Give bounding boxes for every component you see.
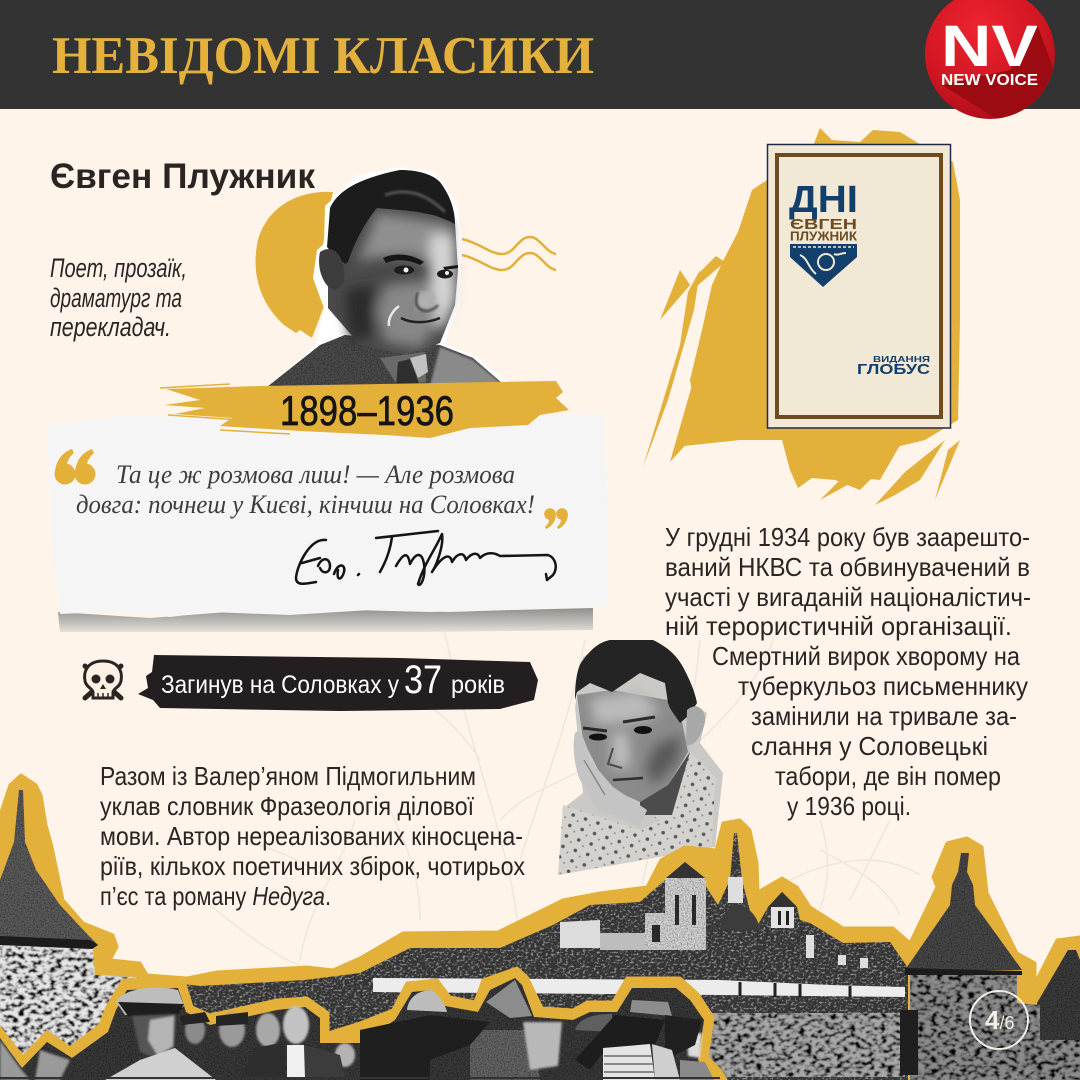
tower roof [0,790,98,945]
face and neck [328,205,458,355]
eyes and brows [383,255,458,270]
icon: closing quotation mark [544,508,568,529]
header bar [0,0,1080,109]
cover author: ПЛУЖНИК [790,228,857,244]
text: occupation: драматург та [50,283,182,313]
brush stroke with dates: 1898–1936 [280,387,454,434]
left tower [0,790,140,1060]
cover publisher: ВИДАННЯ [873,354,930,364]
text: arrest and exile: участі у вигаданій націоналістич- [665,582,1031,612]
text: arrest and exile [665,522,1031,821]
caps [180,1012,248,1026]
text: occupation: перекладач. [50,312,171,342]
text: arrest and exile: Смертний вирок хворому на [712,641,1020,671]
icon: skull and crossbones [85,661,121,698]
faces [132,1006,702,1067]
cover title: ДНІ [789,179,858,221]
brush stroke with dates [160,381,569,438]
text: arrest and exile: табори, де він помер [775,761,1001,791]
title: НЕВІДОМІ КЛАСИКИ [52,27,594,85]
text: works: уклав словник Фразеологія ділової [100,791,474,821]
hand [574,731,647,827]
yellow outline of skyline [0,775,1080,1080]
page indicator: 4/6 [985,1005,1014,1035]
text: arrest and exile: у 1936 році. [787,791,911,821]
shirts [105,1048,216,1080]
text: arrest and exile: слання у Соловецькі [751,731,988,761]
text: works: мови. Автор нереалізованих кіносцена- [100,821,523,851]
portrait: Yevhen Pluzhnyk [264,167,508,392]
quote block [54,449,568,529]
book cover: Dni [768,144,950,428]
figures at left edge [0,1040,70,1080]
text: works: ріїв, кількох поетичних збірок, чотирьох [100,851,525,881]
death fact banner: років [451,671,505,699]
eyes, nose and mouth [583,717,655,731]
collar and sleeve pattern [558,760,715,875]
logo: NV New Voice [925,0,1055,119]
face [577,690,688,802]
portrait: writer resting head on hand [558,640,723,875]
tower wall [910,973,1017,1080]
signature [296,531,556,585]
crowd of prisoners [0,978,720,1080]
page indicator [970,991,1028,1049]
text: occupation: Поет, прозаїк, [50,253,187,283]
text: works: Разом із Валер’яном Підмогильним [100,761,476,791]
yellow paint splash behind book [643,128,960,505]
shirt collar and tie [380,352,426,386]
text: occupation [50,253,187,342]
text: works: п’єс та роману Недуга. [100,881,331,911]
coats and arms [470,1030,540,1080]
lower brick wall [700,1013,905,1077]
heading: name: Євген Плужник [50,157,315,196]
ear [686,706,705,745]
yellow half sun [256,192,333,338]
cover ornament [790,244,857,287]
text: arrest and exile: замінили на тривале за- [751,701,1017,731]
right tower [900,853,1022,1080]
hair [327,170,455,264]
ear [319,249,344,290]
faint bare trees backdrop [210,610,920,965]
collage: Solovki monastery and prisoners [0,775,1080,1080]
hair [575,640,697,723]
jacket [267,335,503,387]
text: arrest and exile: ваний НКВС та обвинувачений в [665,552,1030,582]
text: arrest and exile: ній терористичній організації. [665,611,1012,641]
text: works [100,761,525,911]
death fact banner: 37 [404,658,442,702]
yellow outline of crowd [0,968,726,1080]
quote block: довга: почнеш у Києві, кінчиш на Соловках! [76,490,535,519]
tower wall [0,945,140,1060]
white wall strip [373,978,905,997]
text: arrest and exile: У грудні 1934 року був заарешто- [665,522,1030,552]
tower roof [905,853,1022,970]
death fact banner: Загинув на Соловках у [161,671,399,699]
quote paper [47,414,608,632]
logo: NV New Voice: NEW VOICE [941,72,1038,89]
monastery roofs [130,833,908,1080]
far right tower and wall [1017,950,1080,1080]
death fact banner [138,655,538,711]
monastery buildings [560,862,868,968]
book cover: Dni: ГЛОБУС [857,361,930,378]
icon: opening quotation mark [54,449,96,484]
nose and mouth [416,292,438,311]
quote text: Та це ж розмова лиш! — Але розмова [116,460,515,489]
cover author: ЄВГЕН [790,216,857,233]
decorative waves [462,237,556,270]
cover author [790,216,857,244]
cap of foreground man [116,988,184,1015]
logo: NV New Voice: NV [941,14,1038,79]
text: arrest and exile: туберкульоз письменнику [738,671,1028,701]
